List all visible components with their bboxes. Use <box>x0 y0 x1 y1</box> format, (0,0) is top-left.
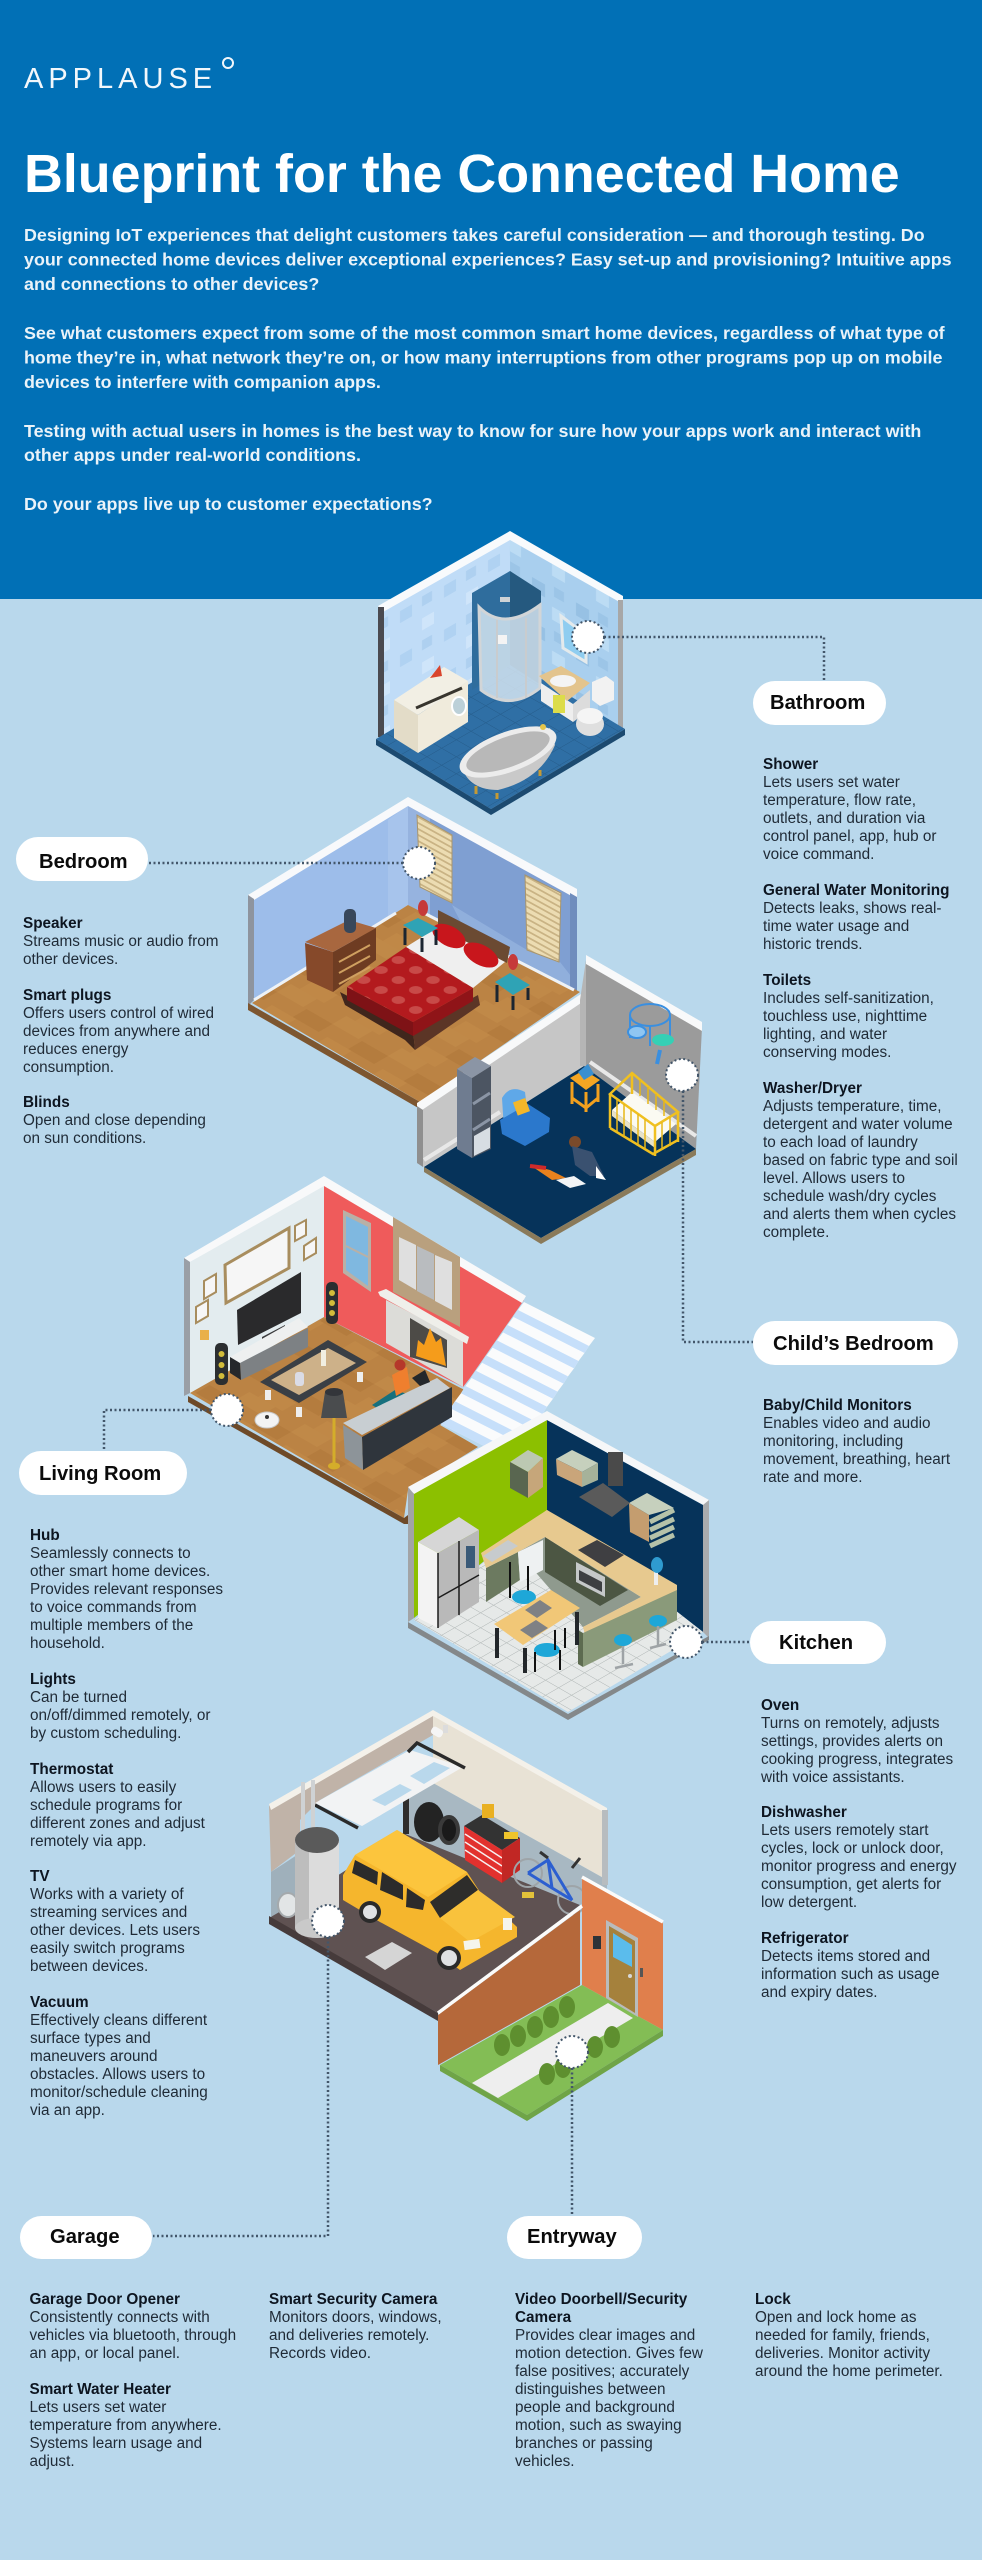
hotspots <box>211 621 702 2068</box>
intro text: your connected home devices deliver exceptional experiences? Easy set-up and provisioning? Intuitive apps <box>24 250 952 270</box>
text: Bathroom devices: Lets users set water <box>763 774 900 791</box>
text: Bedroom devices: Blinds <box>23 1094 70 1111</box>
bathroom top edge <box>378 531 623 612</box>
text: Living Room devices: different zones and adjust <box>30 1815 206 1832</box>
text: Living Room devices: surface types and <box>30 2030 151 2047</box>
kitchen green wall <box>413 1420 547 1618</box>
side table and monitor <box>570 1064 600 1112</box>
intro text: Designing IoT experiences that delight customers takes careful consideration — and thorough testing. Do <box>24 225 925 245</box>
text: Kitchen devices: with voice assistants. <box>760 1769 905 1786</box>
text: Child's Bedroom devices: monitoring, including <box>763 1433 903 1450</box>
child room right wall <box>584 960 702 1149</box>
toilet <box>576 676 614 736</box>
lamp on counter <box>651 1557 663 1585</box>
text: Entryway devices, column 2: Lock <box>755 2291 791 2308</box>
counters <box>481 1510 677 1667</box>
text: Living Room devices: streaming services and <box>30 1904 187 1921</box>
intro text: and connections to other devices? <box>24 274 319 294</box>
text: Bathroom devices: lighting, and water <box>763 1026 887 1043</box>
text: Entryway devices, column 1: people and background <box>515 2399 675 2416</box>
text: Bathroom devices: schedule wash/dry cycles <box>763 1188 937 1205</box>
water heater <box>295 1780 339 1938</box>
crib <box>610 1073 678 1156</box>
bathroom left wall <box>383 537 510 737</box>
text: Garage devices, column 1: temperature from anywhere. <box>30 2417 222 2434</box>
bed <box>340 910 510 1050</box>
text: Garage devices, column 1: Systems learn usage and <box>30 2435 202 2452</box>
label: Bedroom <box>16 837 148 881</box>
porch lamp <box>593 1936 601 1949</box>
bar stools <box>614 1615 667 1668</box>
text: Bedroom devices: other devices. <box>23 951 118 968</box>
text: Kitchen devices: Lets users remotely start <box>761 1822 929 1839</box>
text: Garage devices, column 1: Garage Door Opener <box>30 2291 180 2308</box>
logo: Applause: APPLAUSE <box>24 63 217 95</box>
label: Kitchen <box>750 1621 886 1664</box>
text: Bathroom devices: to each load of laundry <box>763 1134 918 1151</box>
text: Bathroom devices: Toilets <box>763 972 811 989</box>
text: Living Room devices: Allows users to easily <box>30 1779 177 1796</box>
text: Entryway devices, column 2: around the home perimeter. <box>755 2363 943 2380</box>
nightstands and lamps <box>403 900 530 1010</box>
text: Entryway devices, column 1: branches or passing <box>515 2435 653 2452</box>
path <box>472 2003 633 2098</box>
label: Garage <box>20 2216 152 2259</box>
vanity sink <box>539 666 590 722</box>
text: Bathroom devices: and alerts them when cycles <box>763 1206 956 1223</box>
bicycle <box>514 1852 586 1914</box>
text: Living Room devices: on/off/dimmed remotely, or <box>30 1707 211 1724</box>
hob and oven <box>576 1540 624 1597</box>
intro text: other apps under real-world conditions. <box>24 445 361 465</box>
text: Child's Bedroom devices: Enables video and audio <box>763 1415 931 1432</box>
text: Living Room devices: Lights <box>30 1671 76 1688</box>
bookshelf <box>457 1057 491 1158</box>
text: Living Room devices: remotely via app. <box>30 1833 146 1850</box>
washer cabinet <box>394 665 468 753</box>
text: Bathroom devices: Washer/Dryer <box>763 1080 862 1097</box>
cooker hood <box>579 1452 630 1517</box>
text: Living Room devices: other smart home devices. <box>30 1563 210 1580</box>
label: Bathroom <box>753 681 886 725</box>
text: Bedroom devices: on sun conditions. <box>23 1130 146 1147</box>
label: Entryway: Entryway <box>527 2226 618 2248</box>
text: Bedroom devices: Offers users control of wired <box>23 1005 214 1022</box>
bedroom floor <box>252 905 580 1102</box>
tires <box>414 1802 458 1843</box>
text: Garage devices, column 1: adjust. <box>30 2453 75 2470</box>
dining table and chairs <box>494 1562 580 1673</box>
text: Entryway devices, column 1: distinguishes between <box>515 2381 666 2398</box>
garage left wall <box>269 1714 433 1872</box>
text: Entryway devices, column 2: deliveries. Monitor activity <box>755 2345 930 2362</box>
text: Living Room devices: maneuvers around <box>30 2048 158 2065</box>
title: Blueprint for the Connected Home <box>24 144 900 204</box>
label: Entryway <box>507 2216 642 2259</box>
text: Living Room devices: Thermostat <box>30 1761 113 1778</box>
text: Living Room devices: by custom scheduling. <box>30 1725 181 1742</box>
text: Bathroom devices: detergent and water volume <box>763 1116 953 1133</box>
label: Bathroom: Bathroom <box>770 692 865 714</box>
fireplace <box>378 1289 469 1387</box>
text: Bathroom devices: complete. <box>763 1224 829 1241</box>
bathroom floor <box>376 660 625 809</box>
wheel rim <box>278 1893 298 1917</box>
illustration: living room <box>184 1176 595 1524</box>
text: Living Room devices: obstacles. Allows users to <box>30 2066 205 2083</box>
label: Child's Bedroom <box>753 1321 958 1365</box>
illustration: garage and entryway <box>269 1710 663 2121</box>
kitchen floor <box>414 1510 703 1712</box>
text: Garage devices, column 1: vehicles via bluetooth, through <box>30 2327 236 2344</box>
intro text: Do your apps live up to customer expectations? <box>24 494 433 514</box>
text: Entryway devices, column 1: motion detection. Gives few <box>515 2345 704 2362</box>
mobile <box>628 1004 674 1064</box>
intro text: See what customers expect from some of the most common smart home devices, regardless of what type of <box>24 323 945 343</box>
illustration: bedroom <box>248 797 585 1109</box>
label: Kitchen: Kitchen <box>779 1632 853 1654</box>
header band <box>0 0 982 599</box>
connector: bathroom <box>604 637 824 680</box>
living room red wall <box>324 1183 524 1387</box>
label: Child's Bedroom: Child’s Bedroom <box>773 1333 934 1355</box>
garage lower right wall <box>403 1783 607 1905</box>
text: Bathroom devices: voice command. <box>763 846 874 863</box>
text: Bathroom devices: Adjusts temperature, time, <box>763 1098 942 1115</box>
blinds <box>417 815 561 962</box>
refrigerator <box>418 1517 479 1628</box>
television <box>237 1272 301 1345</box>
text: Living Room devices: Effectively cleans different <box>30 2012 208 2029</box>
text: Kitchen devices: low detergent. <box>761 1894 857 1911</box>
text: Bathroom devices: based on fabric type and soil <box>763 1152 958 1169</box>
TV cabinet <box>230 1318 308 1380</box>
dresser and speaker <box>305 909 376 992</box>
text: Garage devices, column 2: Smart Security Camera <box>269 2291 438 2308</box>
garage top edge <box>269 1710 607 1814</box>
text: Child's Bedroom devices: rate and more. <box>763 1469 862 1486</box>
text: Kitchen devices: and expiry dates. <box>761 1984 878 2001</box>
text: Kitchen devices: Turns on remotely, adjusts <box>761 1715 940 1732</box>
text: Living Room devices: multiple members of the <box>30 1617 193 1634</box>
text: Living Room devices: Seamlessly connects to <box>30 1545 191 1562</box>
connector: garage <box>153 1937 328 2236</box>
text: Bathroom devices: time water usage and <box>763 918 909 935</box>
kitchen navy wall <box>547 1420 703 1632</box>
text: Garage devices, column 2: Records video. <box>269 2345 371 2362</box>
connector: child's bedroom <box>683 1091 753 1342</box>
chimney breast <box>393 1217 460 1327</box>
text: Kitchen devices: settings, provides alerts on <box>761 1733 943 1750</box>
floor mat <box>365 1942 412 1970</box>
text: Bathroom devices: outlets, and duration via <box>763 810 926 827</box>
text: Bathroom devices: control panel, app, hub or <box>763 828 936 845</box>
text: Living Room devices: Provides relevant responses <box>30 1581 223 1598</box>
text: Living Room devices: between devices. <box>30 1958 148 1975</box>
front door <box>606 1920 643 2017</box>
label: Garage: Garage <box>50 2226 120 2248</box>
wall top edges <box>438 1877 663 2013</box>
intro text: home they’re in, what network they’re on, or how many interruptions from other programs pop up on mobile <box>24 348 943 368</box>
connector: bedroom <box>149 862 404 864</box>
staircase <box>440 1302 595 1460</box>
text: Child's Bedroom devices: movement, breathing, heart <box>763 1451 951 1468</box>
picture frames <box>196 1220 316 1340</box>
text: Bedroom devices: devices from anywhere and <box>23 1023 210 1040</box>
garage right wall <box>433 1714 607 1880</box>
text: Bedroom devices: consumption. <box>23 1059 114 1076</box>
text: Entryway devices, column 2: needed for family, friends, <box>755 2327 930 2344</box>
sofa <box>343 1370 452 1470</box>
text: Entryway devices, column 1: vehicles. <box>515 2453 575 2470</box>
text: Kitchen devices: cooking progress, integrates <box>761 1751 954 1768</box>
text: Kitchen devices: Refrigerator <box>761 1930 849 1947</box>
garage floor <box>269 1833 580 2013</box>
text: Living Room devices: Works with a variety of <box>30 1886 184 1903</box>
text: Kitchen devices: monitor progress and energy <box>761 1858 957 1875</box>
connector: kitchen <box>702 1641 750 1643</box>
text: Child's Bedroom devices: Baby/Child Monitors <box>763 1397 912 1414</box>
text: Entryway devices, column 1: Provides clear images and <box>515 2327 695 2344</box>
label: Living Room: Living Room <box>39 1463 161 1485</box>
orange wall, right face <box>582 1877 663 2030</box>
label: Living Room <box>19 1451 187 1495</box>
text: Living Room devices: Hub <box>30 1527 60 1544</box>
text: Bedroom devices: Speaker <box>23 915 83 932</box>
person on sofa <box>372 1360 410 1410</box>
garage door <box>315 1743 465 1828</box>
text: Kitchen devices: Oven <box>761 1697 799 1714</box>
child room left wall <box>417 995 584 1167</box>
shower alcove <box>472 571 541 690</box>
text: Kitchen devices: Detects items stored and <box>761 1948 930 1965</box>
text: Garage devices, column 1: an app, or local panel. <box>30 2345 180 2362</box>
text: Bathroom devices: Includes self-sanitization, <box>763 990 934 1007</box>
robot vacuum <box>255 1412 279 1428</box>
illustration: kitchen <box>408 1411 709 1720</box>
living room top edge <box>184 1176 526 1303</box>
security camera <box>430 1725 448 1738</box>
window on red wall <box>343 1210 371 1292</box>
text: Bathroom devices: level. Allows users to <box>763 1170 905 1187</box>
text: Bathroom devices: conserving modes. <box>763 1044 891 1061</box>
lawn <box>440 1985 663 2115</box>
mirror <box>561 616 586 662</box>
child room top edges <box>586 955 702 1031</box>
text: Bedroom devices: Smart plugs <box>23 987 111 1004</box>
text: Living Room devices: via an app. <box>30 2102 105 2119</box>
text: Garage devices, column 2: and deliveries remotely. <box>269 2327 429 2344</box>
connector: entryway <box>571 2068 573 2214</box>
text: Bedroom devices: Streams music or audio from <box>23 933 219 950</box>
orange wall, left face <box>438 1910 580 2065</box>
text: Bathroom devices: touchless use, nighttime <box>763 1008 927 1025</box>
living room light wall <box>190 1184 324 1393</box>
text: Kitchen devices: information such as usage <box>761 1966 940 1983</box>
text: Entryway devices, column 1: Camera <box>515 2309 572 2326</box>
label: Bedroom: Bedroom <box>39 851 128 873</box>
text: Living Room devices: Vacuum <box>30 1994 89 2011</box>
text: Kitchen devices: consumption, get alerts for <box>761 1876 941 1893</box>
door column <box>403 1788 409 1834</box>
illustration: bathroom <box>376 531 625 815</box>
sink <box>483 1540 518 1562</box>
tool chest <box>464 1804 520 1883</box>
garage lower left wall <box>271 1853 300 1925</box>
intro text: Testing with actual users in homes is the best way to know for sure how your apps work and interact with <box>24 421 921 441</box>
text: Garage devices, column 2: Monitors doors, windows, <box>269 2309 442 2326</box>
text: Garage devices, column 1: Smart Water Heater <box>30 2381 171 2398</box>
text: Bathroom devices: Shower <box>763 756 818 773</box>
text: Living Room devices: household. <box>30 1635 105 1652</box>
text: Bedroom devices: Open and close depending <box>23 1112 206 1129</box>
text: Entryway devices, column 1: Video Doorbell/Security <box>515 2291 688 2308</box>
text: Bathroom devices: Detects leaks, shows real- <box>763 900 942 917</box>
bedroom top edge <box>248 797 577 900</box>
text: Bedroom devices: reduces energy <box>23 1041 129 1058</box>
text: Garage devices, column 1: Lets users set water <box>30 2399 166 2416</box>
adult and child on the floor <box>530 1136 606 1188</box>
coffee table <box>260 1340 367 1417</box>
bathroom right wall <box>510 537 620 728</box>
yellow car <box>343 1830 517 1970</box>
text: Living Room devices: Can be turned <box>30 1689 127 1706</box>
carpet <box>424 1066 696 1238</box>
shower enclosure <box>479 597 540 701</box>
speakers <box>215 1282 338 1385</box>
text: Living Room devices: monitor/schedule cleaning <box>30 2084 208 2101</box>
kitchen top edge <box>408 1411 709 1508</box>
floor lamp <box>321 1388 347 1470</box>
text: Kitchen devices: cycles, lock or unlock door, <box>761 1840 944 1857</box>
bushes <box>494 1996 620 2085</box>
illustration: child's bedroom <box>417 955 702 1244</box>
text: Garage devices, column 1: Consistently connects with <box>30 2309 210 2326</box>
text: Living Room devices: to voice commands from <box>30 1599 197 1616</box>
text: Living Room devices: TV <box>30 1868 50 1885</box>
upper cabinets <box>510 1450 674 1546</box>
text: Entryway devices, column 2: Open and lock home as <box>755 2309 917 2326</box>
bedroom right wall <box>408 805 574 992</box>
text: Living Room devices: schedule programs for <box>30 1797 182 1814</box>
text: Bathroom devices: temperature, flow rate, <box>763 792 916 809</box>
dishwasher <box>518 1540 543 1582</box>
armchair <box>500 1089 550 1146</box>
bath tub <box>453 716 563 799</box>
text: Entryway devices, column 1: false positives; accurately <box>515 2363 690 2380</box>
text: Bathroom devices: historic trends. <box>763 936 862 953</box>
intro text: devices to interfere with companion apps. <box>24 372 381 392</box>
text: Entryway devices, column 1: motion, such as swaying <box>515 2417 682 2434</box>
text: Kitchen devices: Dishwasher <box>761 1804 847 1821</box>
living room floor <box>190 1317 480 1518</box>
bedroom left wall <box>254 805 408 1000</box>
text: Living Room devices: easily switch programs <box>30 1940 185 1957</box>
connector: living room <box>104 1410 211 1451</box>
text: Bathroom devices: General Water Monitoring <box>763 882 949 899</box>
text: Living Room devices: other devices. Lets users <box>30 1922 200 1939</box>
